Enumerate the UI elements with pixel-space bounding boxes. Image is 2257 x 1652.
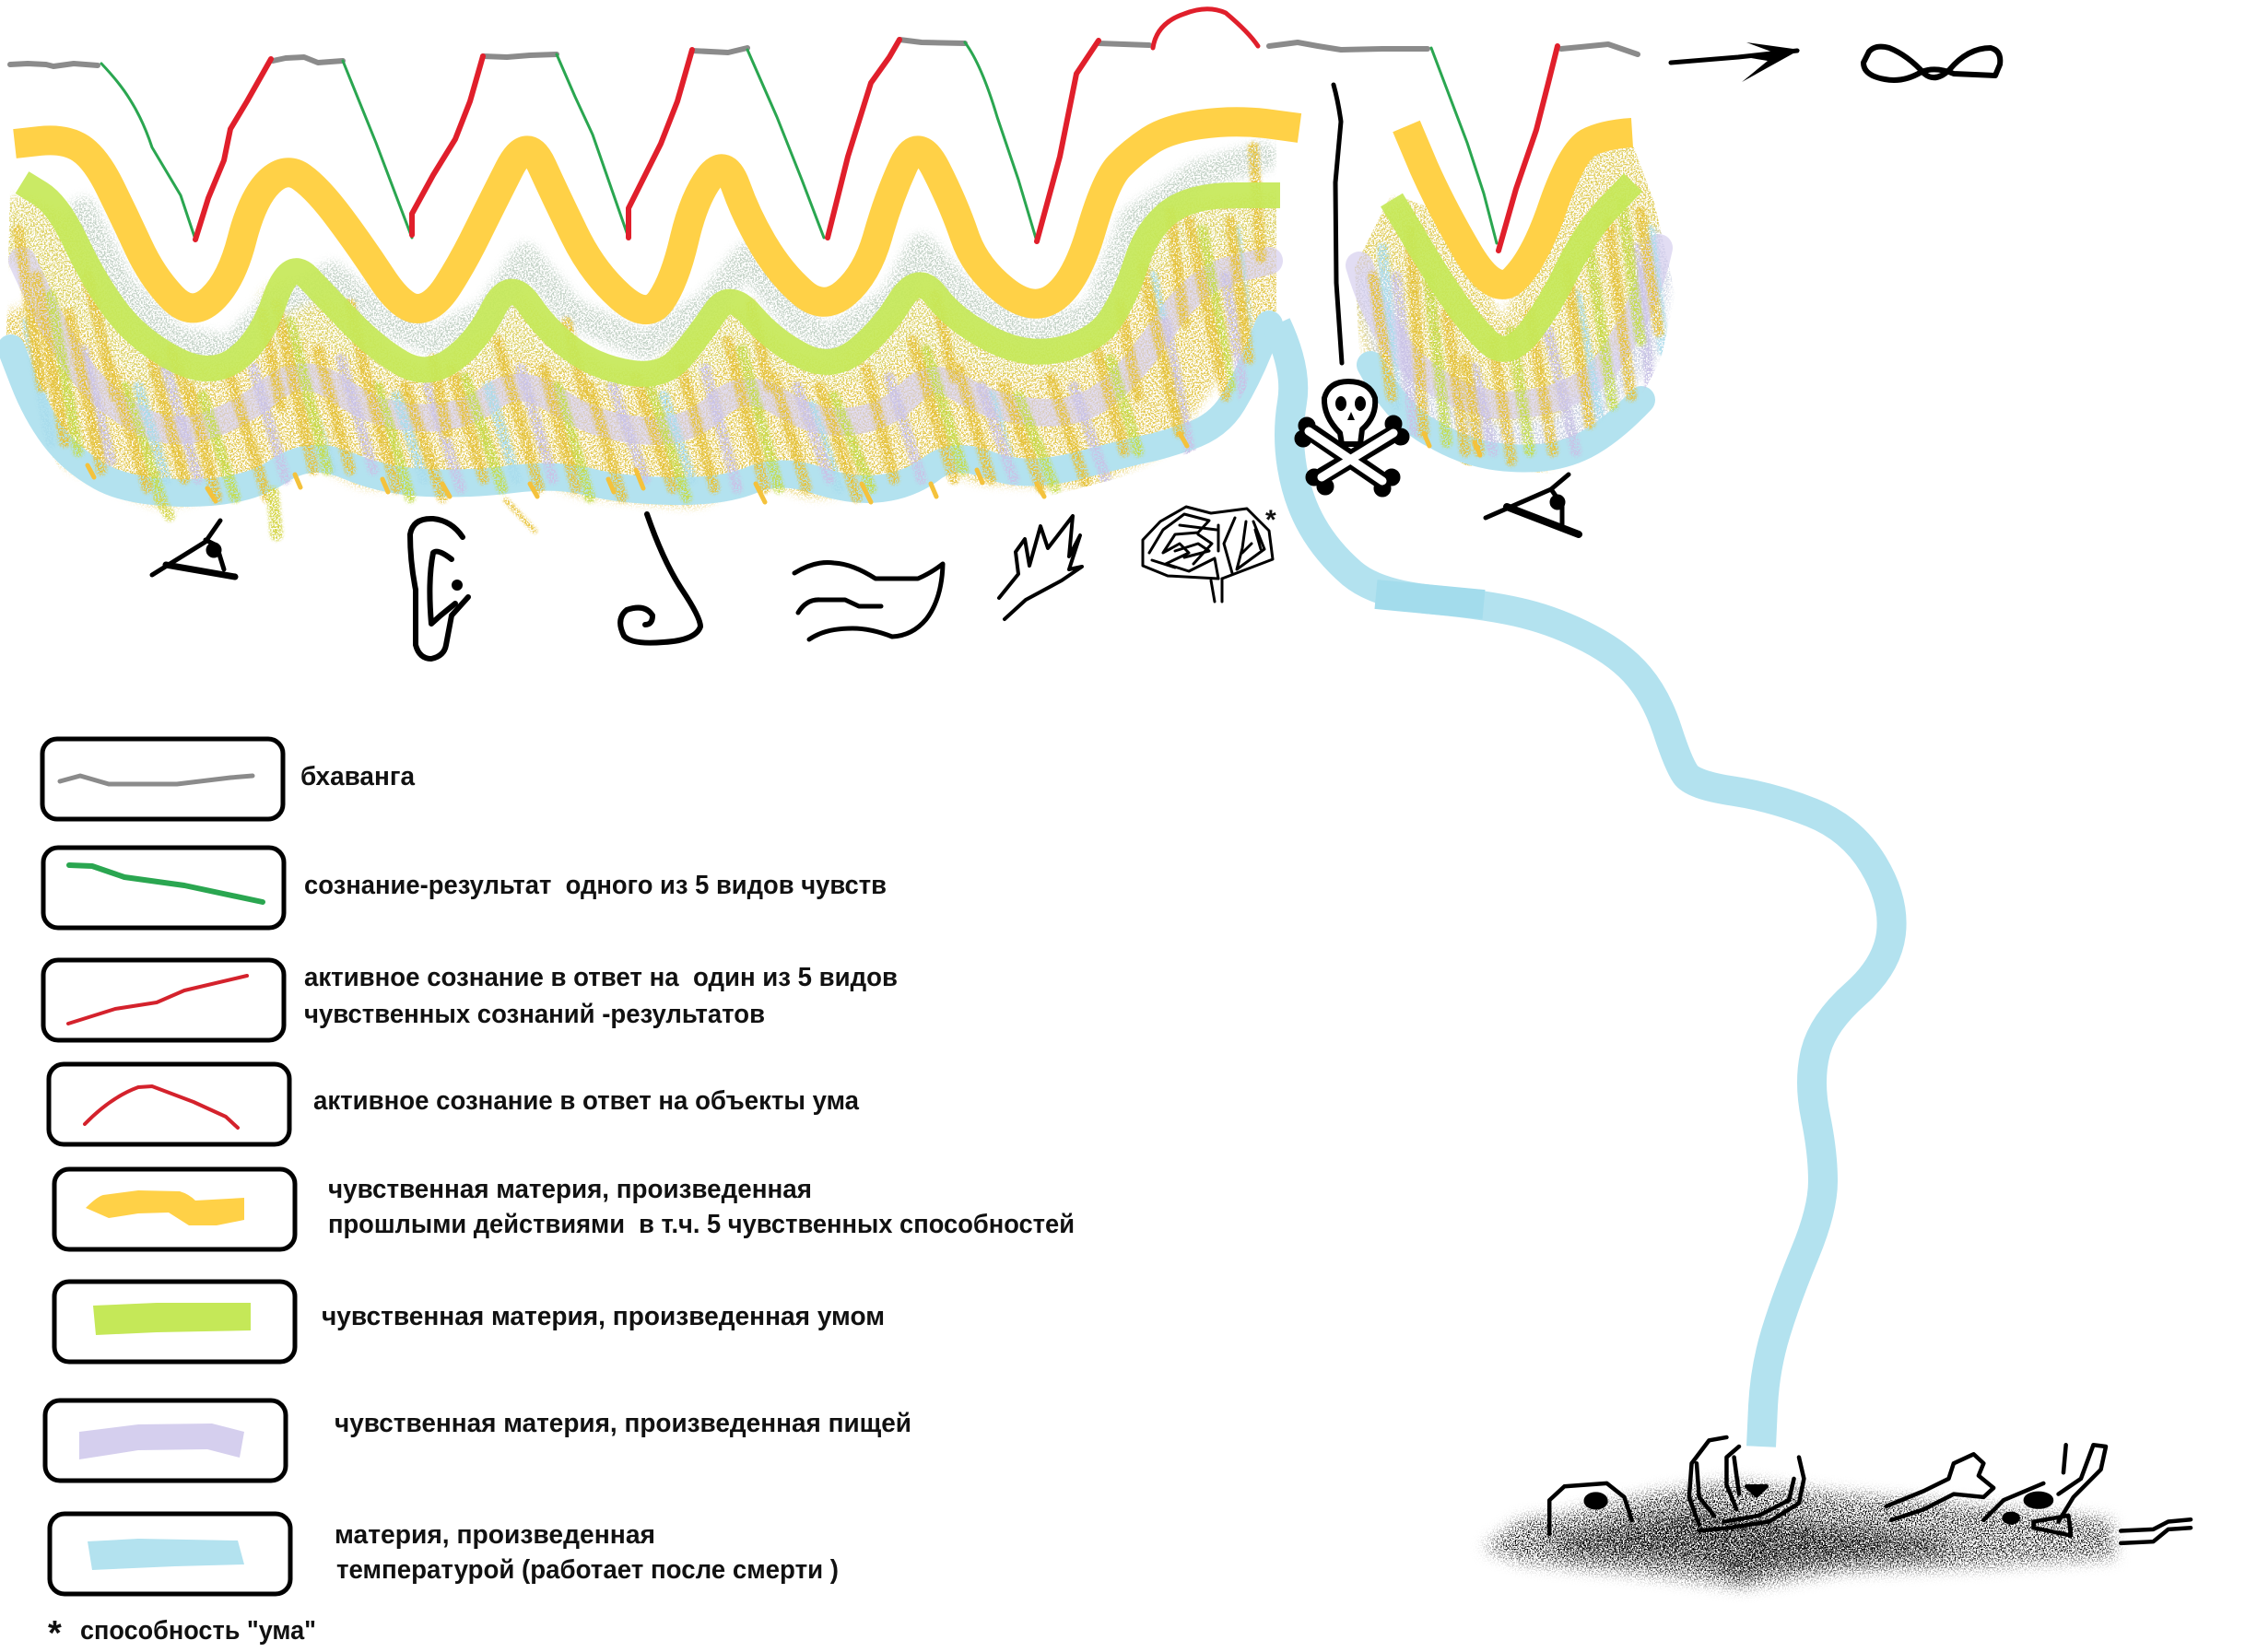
icon: brain [1143,507,1273,602]
legend item: active consciousness in response to sense consciousness: чувственных сознаний -результатов [304,1000,765,1029]
legend item: mind-produced sensory matter [54,1282,885,1362]
bhavanga lines [10,40,1638,66]
streak tips [88,433,1480,502]
stippled matter halo: right wing [1373,203,1659,442]
legend item: past-action sensory matter [54,1169,1075,1249]
legend item: resultant consciousness: сознание-результат одного из 5 видов чувств [304,871,887,900]
footnote: * [48,1614,62,1652]
band: matter produced by food, right [1359,248,1659,405]
legend item: mind-produced sensory matter: чувственная материя, произведенная умом [322,1302,885,1331]
legend item: temperature-produced matter: температурой (работает после смерти ) [336,1555,839,1585]
band: matter produced by temperature, left [11,324,1269,493]
icon: eye of right-hand sequence [1486,475,1579,534]
legend item: resultant consciousness [43,848,887,928]
legend item: bhavanga [42,739,416,819]
footnote [48,1614,316,1652]
icon: eye [152,521,235,577]
footnote: способность "ума" [80,1616,316,1646]
icon: tongue [794,562,943,639]
legend item: active consciousness in response to objects of mind [49,1064,860,1144]
active consciousness arc in response to objects of mind [1153,9,1258,48]
legend item: past-action sensory matter: чувственная материя, произведенная [328,1175,812,1204]
asterisk on brain: * [1265,505,1276,535]
arrow to infinity [1671,42,1800,82]
band: sensory matter produced by mind, left [22,182,1280,374]
stray drips below the left band [159,493,535,534]
band: matter produced by temperature, right [1370,365,1641,459]
legend item: bhavanga: бхаванга [300,762,416,791]
icon: skull and crossbones [1295,381,1409,497]
legend [42,739,1075,1652]
ground: remains scattered in earth [1484,1482,2115,1587]
icon: nose [620,514,700,643]
band: sensory matter produced by mind, right [1392,182,1633,349]
icon: hand [999,516,1082,619]
streaks of stippled matter, left wing [18,147,1261,498]
legend item: past-action sensory matter: прошлыми действиями в т.ч. 5 чувственных способностей [328,1210,1075,1239]
icon: infinity [1863,47,2000,80]
icon: ear [410,519,468,659]
legend item: active consciousness in response to sense consciousness [43,960,898,1040]
legend item: temperature-produced matter [50,1514,839,1594]
remains: skull, ribs, bones [1549,1437,2191,1543]
resultant consciousness lines (green) [101,42,1497,243]
streaks of stippled matter, right wing [1373,203,1663,461]
stippled matter halo: left wing [22,157,1280,451]
legend item: temperature-produced matter: материя, произведенная [335,1520,655,1550]
active consciousness lines (red) [195,40,1558,251]
legend item: food-produced sensory matter: чувственная материя, произведенная пищей [335,1409,911,1438]
band: sensory matter produced by past actions, right [1406,126,1632,285]
band: sensory matter produced by past actions, left [15,122,1299,310]
legend item: food-produced sensory matter [45,1400,911,1481]
band: matter produced by food, left [22,261,1269,431]
river of temperature-produced matter flowing after death [1276,324,1892,1447]
divider: mortality line [1334,85,1342,363]
legend item: active consciousness in response to sense consciousness: активное сознание в ответ на один из 5 видов [304,963,898,992]
legend item: active consciousness in response to objects of mind: активное сознание в ответ на объекты ума [313,1086,860,1116]
